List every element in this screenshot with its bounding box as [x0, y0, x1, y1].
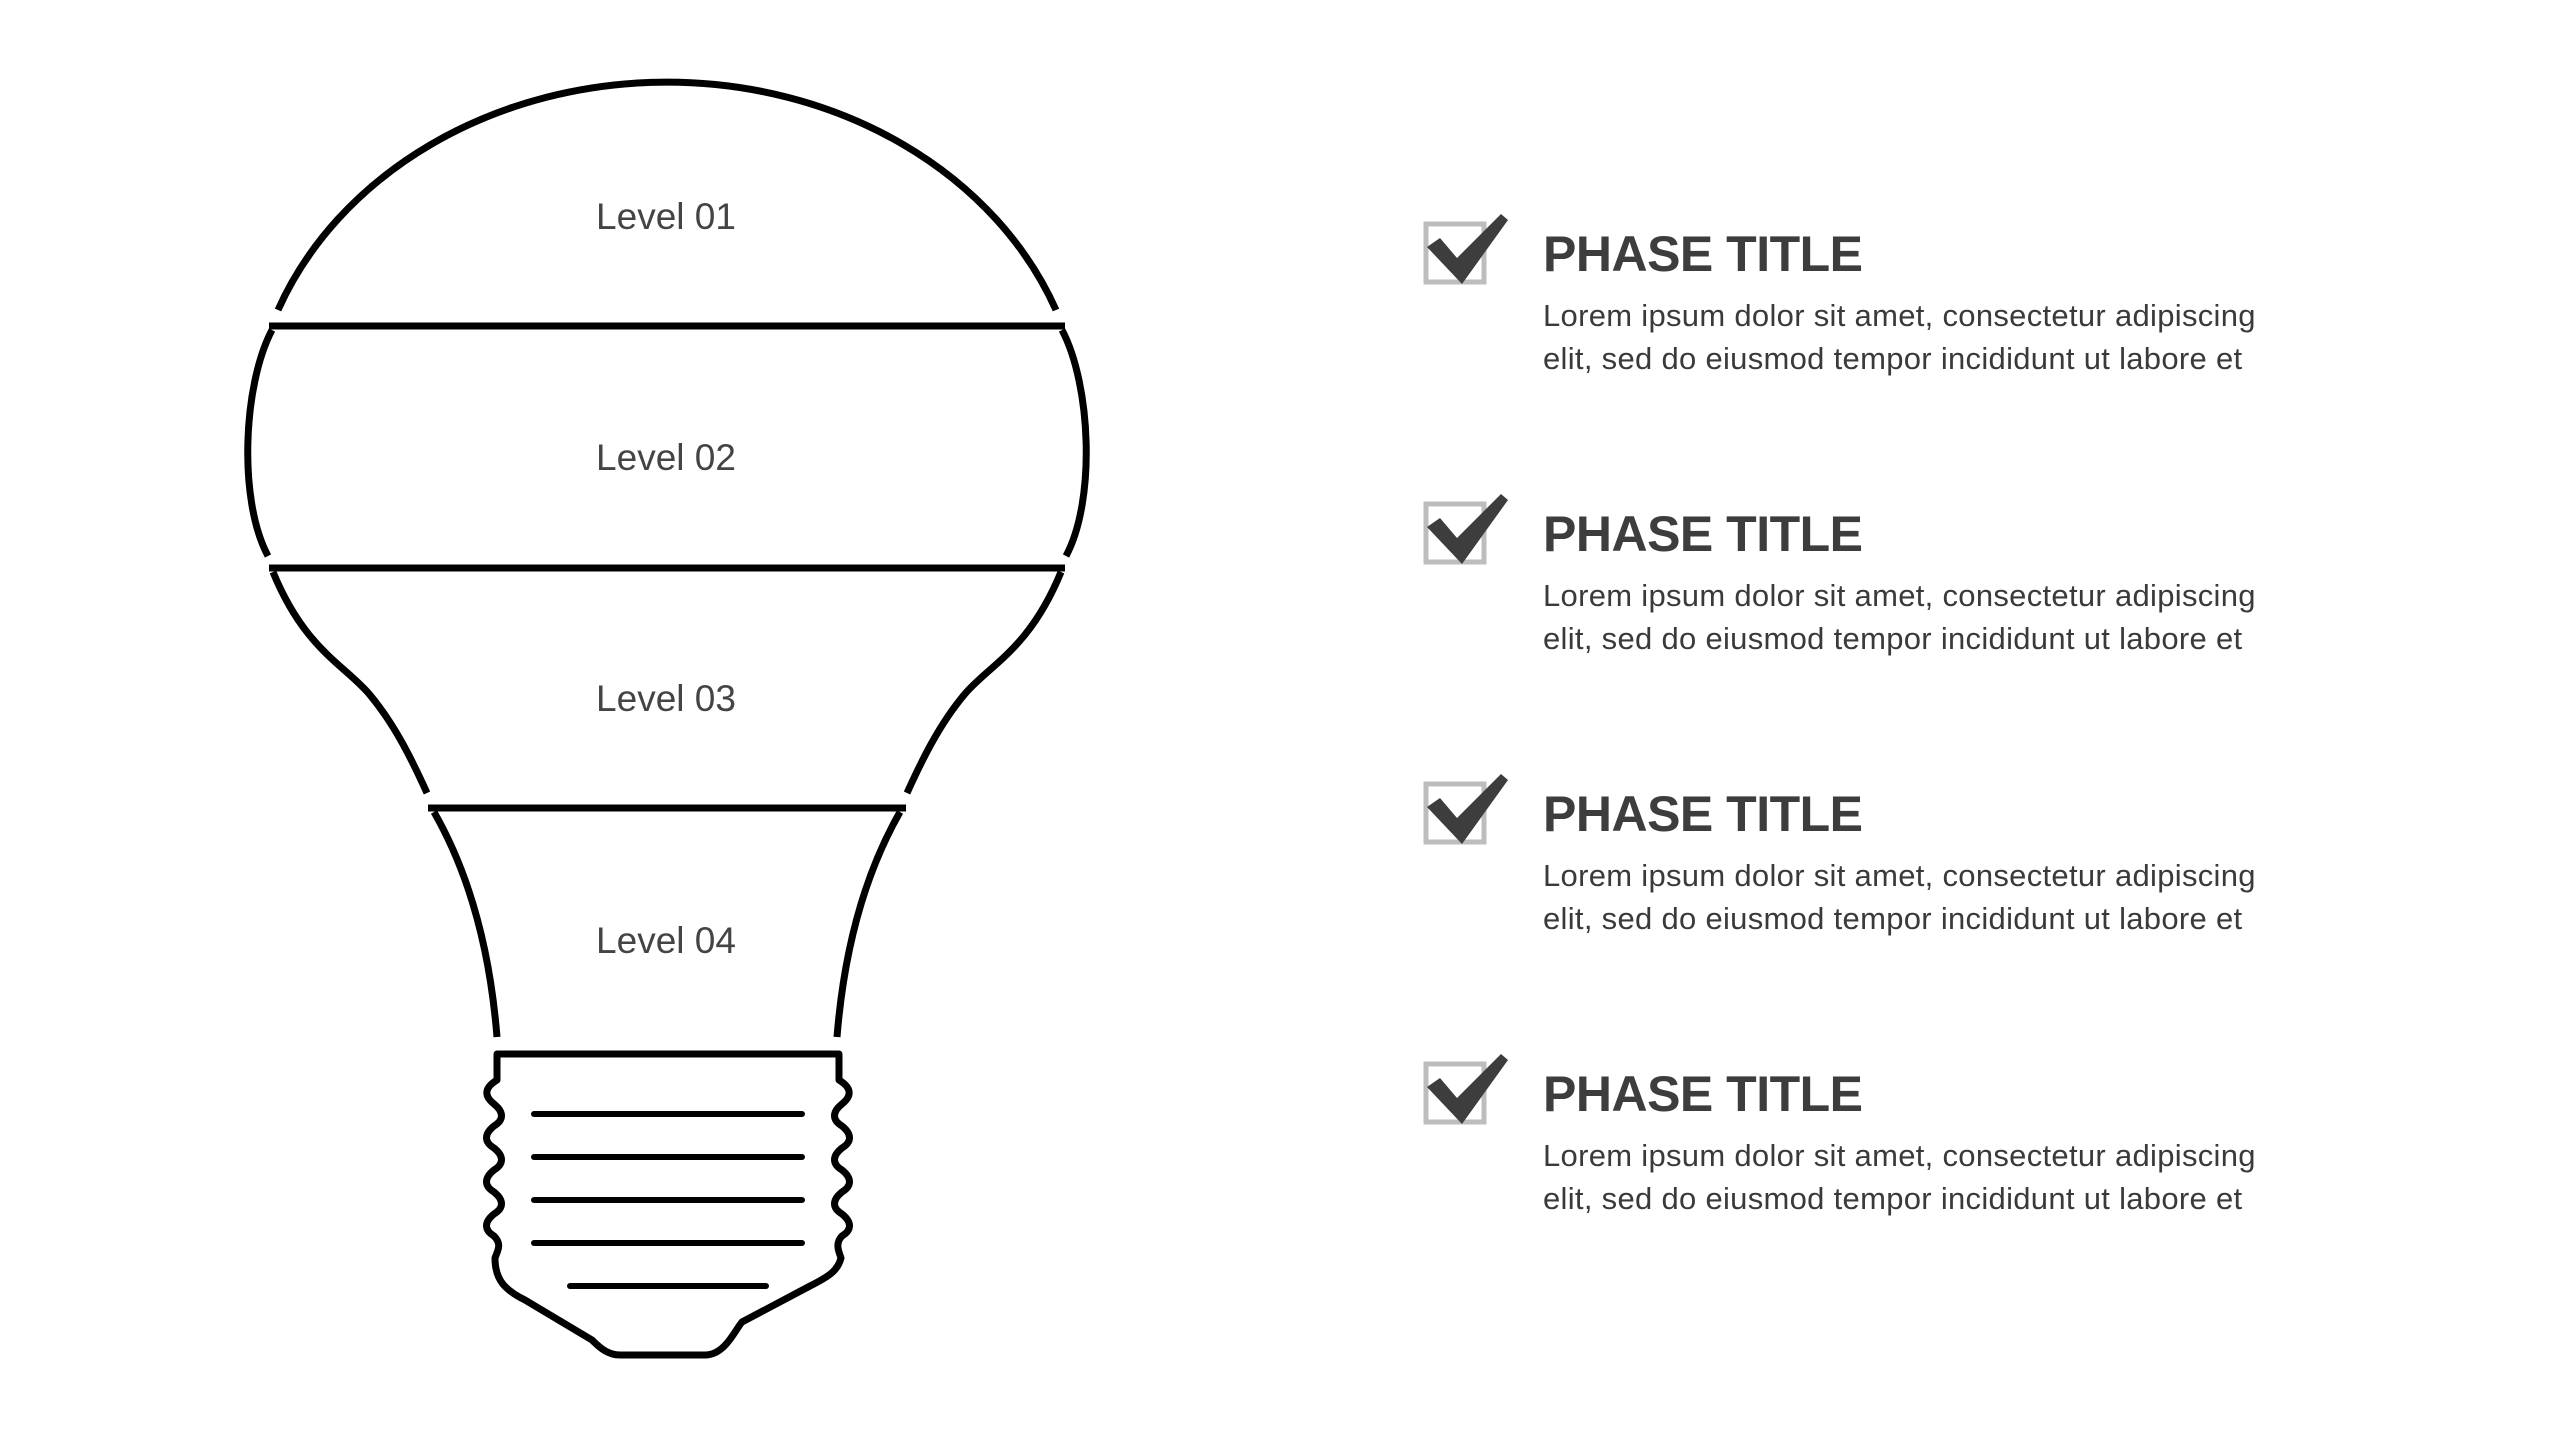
- heading: PHASE TITLE: [1543, 786, 1863, 842]
- phase item 4: [1424, 1054, 2256, 1216]
- icon: checkbox: [1424, 774, 1508, 844]
- light bulb diagram: [244, 78, 1090, 1358]
- text block: elit, sed do eiusmod tempor incididunt ut labore et: [1543, 1181, 2242, 1216]
- text block: Lorem ipsum dolor sit amet, consectetur adipiscing: [1543, 578, 2256, 613]
- text block: Lorem ipsum dolor sit amet, consectetur adipiscing: [1543, 298, 2256, 333]
- text block: elit, sed do eiusmod tempor incididunt ut labore et: [1543, 901, 2242, 936]
- heading: PHASE TITLE: [1543, 1066, 1863, 1122]
- text block: Lorem ipsum dolor sit amet, consectetur adipiscing: [1543, 1138, 2256, 1173]
- bulb segment: level 01: [278, 82, 1056, 310]
- bulb segment: level 04: Level 04: [596, 920, 736, 961]
- icon: checkbox: [1424, 214, 1508, 284]
- bulb segment: level 02: [248, 326, 1086, 556]
- bulb segment: level 03: Level 03: [596, 678, 736, 719]
- heading: PHASE TITLE: [1543, 506, 1863, 562]
- bulb screw base: [486, 1054, 850, 1355]
- bulb segment: level 01: Level 01: [596, 196, 736, 237]
- icon: checkbox: [1424, 1054, 1508, 1124]
- text block: [1543, 578, 2256, 656]
- phase item 3: [1424, 774, 2256, 936]
- icon: checkbox: [1424, 494, 1508, 564]
- text block: [1543, 858, 2256, 936]
- heading: PHASE TITLE: [1543, 226, 1863, 282]
- text block: [1543, 1138, 2256, 1216]
- text block: Lorem ipsum dolor sit amet, consectetur adipiscing: [1543, 858, 2256, 893]
- bulb segment: level 04: [428, 808, 906, 1037]
- text block: elit, sed do eiusmod tempor incididunt ut labore et: [1543, 341, 2242, 376]
- bulb segment: level 02: Level 02: [596, 437, 736, 478]
- text block: [1543, 298, 2256, 376]
- phase item 2: [1424, 494, 2256, 656]
- phase item 1: [1424, 214, 2256, 376]
- bulb segment: level 03: [269, 568, 1065, 793]
- text block: elit, sed do eiusmod tempor incididunt ut labore et: [1543, 621, 2242, 656]
